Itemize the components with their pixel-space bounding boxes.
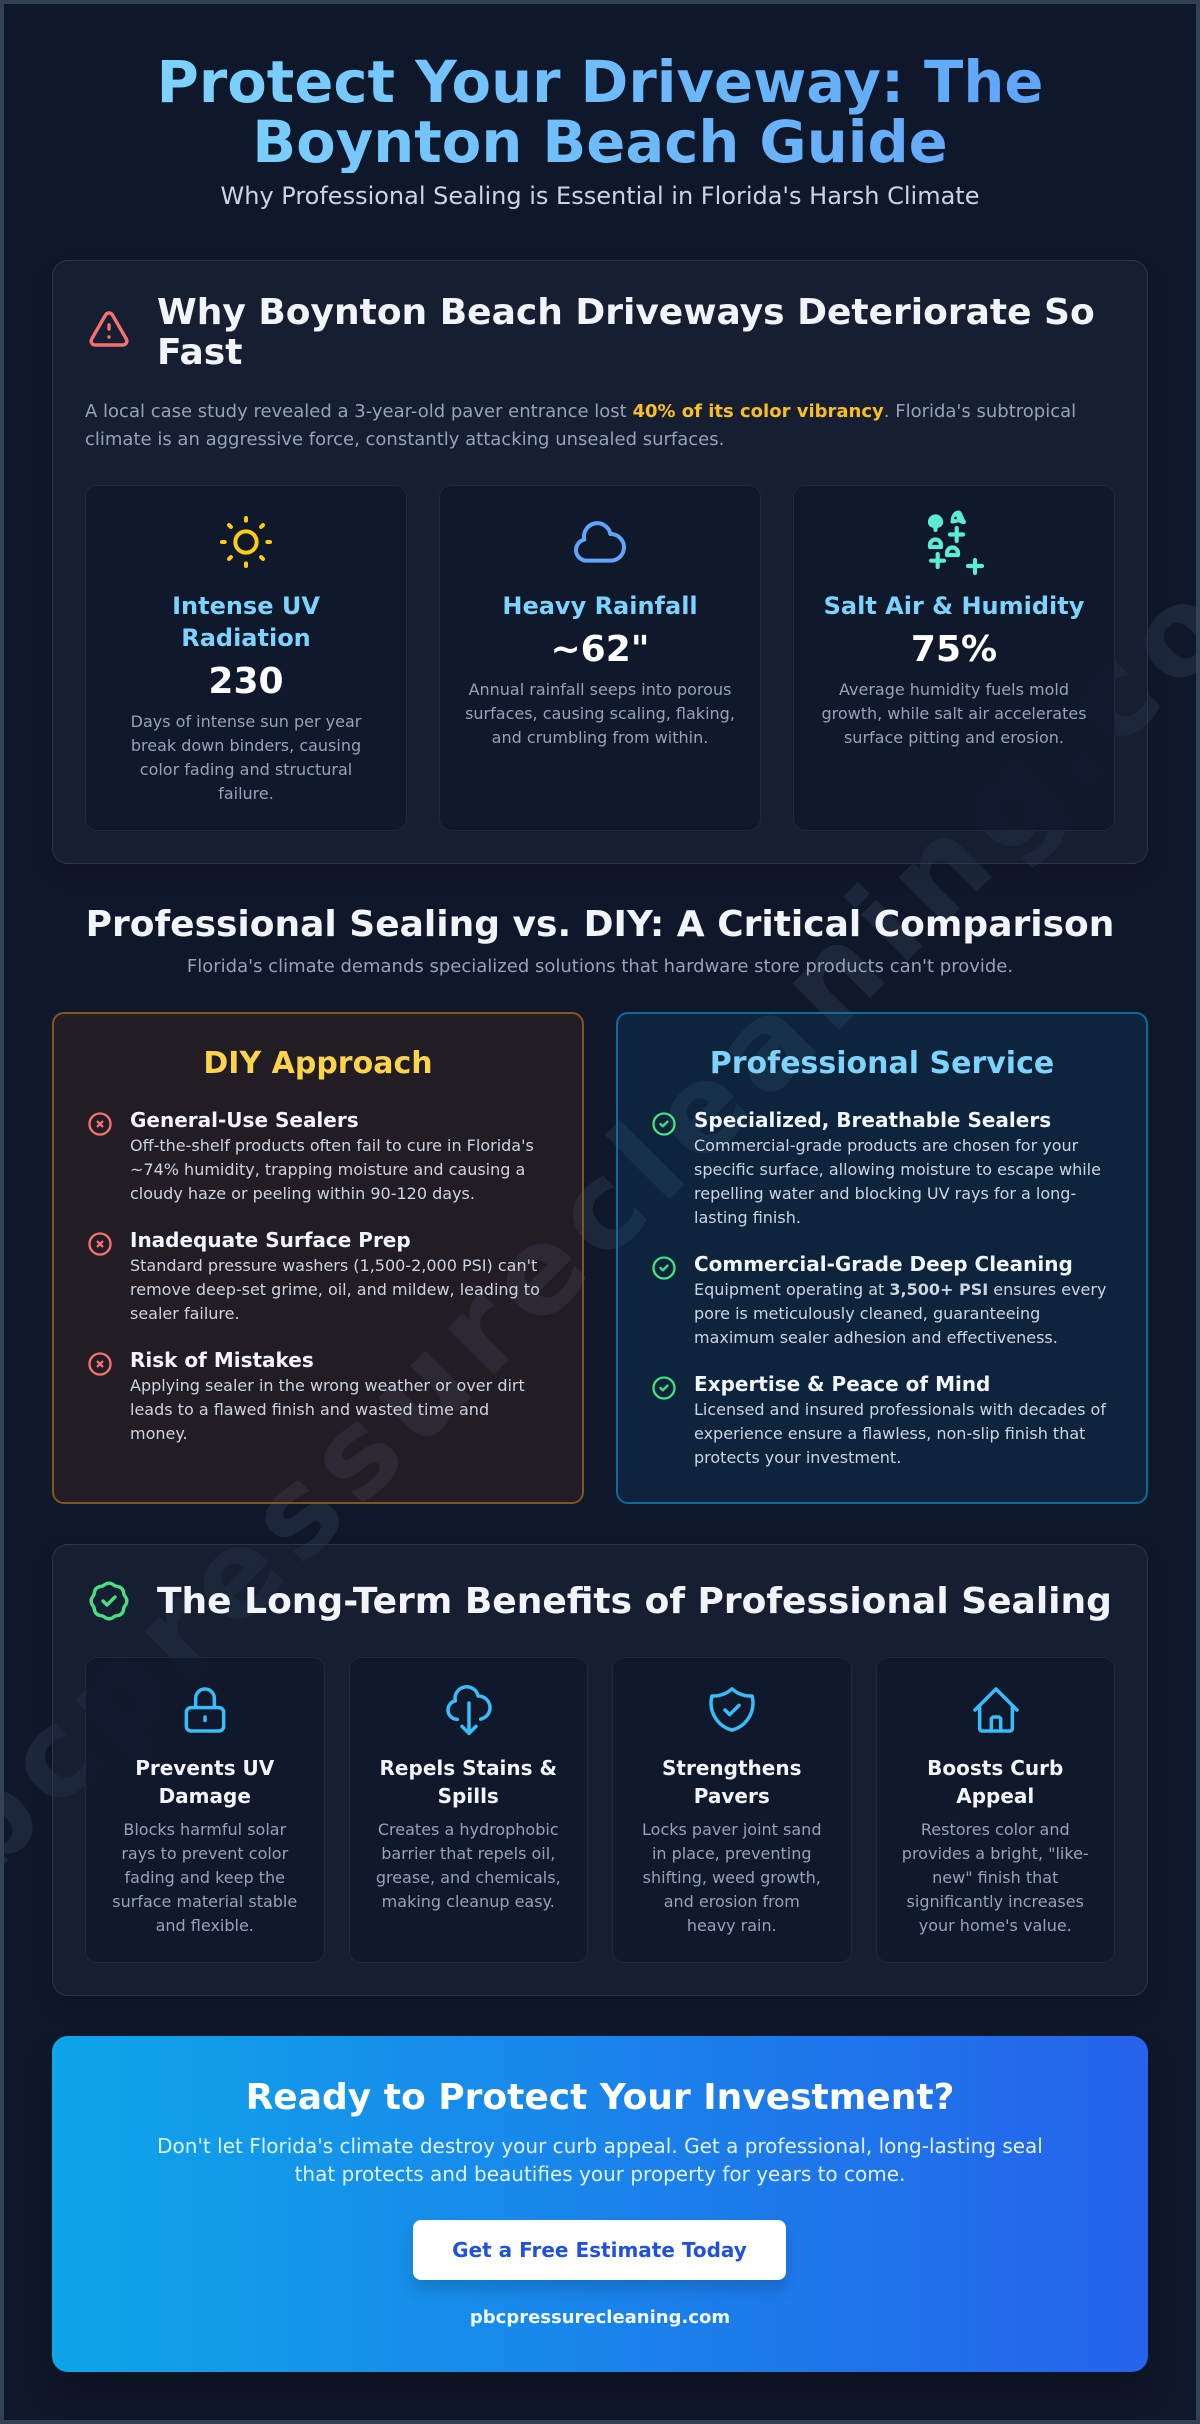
stat description: Average humidity fuels mold	[839, 680, 1069, 699]
item description: money.	[130, 1424, 188, 1443]
list item: expertise	[652, 1372, 1106, 1467]
item description: protects your investment.	[694, 1448, 901, 1467]
item description: ~74% humidity, trapping moisture and causing a	[130, 1160, 525, 1179]
icon: badge check	[89, 1582, 128, 1620]
item title: Commercial-Grade Deep Cleaning	[694, 1252, 1073, 1276]
CTA paragraph: Don't let Florida's climate destroy your curb appeal. Get a professional, long-lasting seal	[157, 2134, 1043, 2158]
icon: check circle	[652, 1256, 676, 1280]
benefit description	[876, 1818, 1114, 1938]
comparison subtitle: Florida's climate demands specialized solutions that hardware store products can't provide.	[187, 956, 1013, 977]
stat number: 75%	[911, 629, 997, 670]
benefit description: surface material stable	[112, 1892, 297, 1911]
icon: x circle	[88, 1352, 112, 1376]
benefit description	[112, 1820, 297, 1935]
DIY heading: DIY Approach	[203, 1046, 433, 1081]
stat description: color fading and structural	[140, 760, 352, 779]
item description: leads to a flawed finish and wasted time and	[130, 1400, 489, 1419]
stat description: surfaces, causing scaling, flaking,	[465, 704, 735, 723]
subtitle: Why Professional Sealing is Essential in Florida's Harsh Climate	[220, 182, 979, 210]
benefit description: in place, preventing	[652, 1844, 812, 1863]
benefit description: shifting, weed growth,	[643, 1868, 821, 1887]
stat description: and crumbling from within.	[492, 728, 708, 747]
icon: home	[973, 1687, 1019, 1733]
icon: check circle	[652, 1376, 676, 1400]
item title: General-Use Sealers	[130, 1108, 359, 1132]
icon: lock	[184, 1687, 226, 1733]
CTA paragraph	[52, 2132, 1148, 2188]
list item: general-use sealers	[88, 1108, 534, 1203]
benefit description: Blocks harmful solar	[123, 1820, 286, 1839]
item description	[130, 1136, 534, 1203]
benefit description: fading and keep the	[124, 1868, 285, 1887]
stat number: 230	[208, 661, 284, 702]
website link: pbcpressurecleaning.com	[470, 2307, 730, 2328]
item description: Standard pressure washers (1,500-2,000 PSI) can't	[130, 1256, 537, 1275]
item description	[694, 1400, 1106, 1467]
heading: comparison: Professional Sealing vs. DIY: A Critical Comparison	[86, 904, 1114, 945]
item description: remove deep-set grime, oil, and mildew, leading to	[130, 1280, 540, 1299]
stat description: failure.	[218, 784, 274, 803]
stat description: Annual rainfall seeps into porous	[469, 680, 731, 699]
benefit description: heavy rain.	[687, 1916, 777, 1935]
stat description	[465, 680, 735, 747]
icon: x circle	[88, 1112, 112, 1136]
benefit description: significantly increases	[907, 1892, 1084, 1911]
heading: why driveways deteriorate	[157, 292, 1095, 373]
stat title: Radiation	[181, 624, 311, 652]
item description	[694, 1280, 1106, 1347]
benefit description	[376, 1820, 561, 1911]
benefit card: curb appeal	[876, 1657, 1115, 1963]
item description: cloudy haze or peeling within 90-120 days.	[130, 1184, 475, 1203]
benefit title	[380, 1756, 557, 1808]
stat description: growth, while salt air accelerates	[821, 704, 1087, 723]
benefit description: provides a bright, "like-	[902, 1844, 1089, 1863]
icon: cloud	[574, 521, 626, 563]
panel: professional service	[616, 1012, 1148, 1504]
benefit description: Creates a hydrophobic	[378, 1820, 559, 1839]
icon: cloud download	[446, 1685, 492, 1736]
benefit title: Prevents UV	[135, 1756, 274, 1780]
benefit title	[135, 1756, 274, 1808]
benefit card: stains	[348, 1657, 588, 1963]
panel: why driveways deteriorate	[52, 260, 1148, 864]
list item: deep cleaning	[652, 1252, 1106, 1347]
benefit description: Restores color and	[921, 1820, 1070, 1839]
item description: repelling water and blocking UV rays for a long-	[694, 1184, 1076, 1203]
stat title: Heavy Rainfall	[502, 592, 698, 620]
CTA button	[413, 2220, 786, 2280]
icon: shield check	[709, 1687, 755, 1732]
heading: benefits: The Long-Term Benefits of Professional Sealing	[157, 1581, 1112, 1622]
professional heading: Professional Service	[710, 1046, 1054, 1081]
stat description: Days of intense sun per year	[131, 712, 361, 731]
benefit title: Pavers	[694, 1784, 770, 1808]
item description: sealer failure.	[130, 1304, 240, 1323]
benefit title	[876, 1754, 1114, 1810]
list item: surface prep	[88, 1228, 540, 1323]
item description: maximum sealer adhesion and effectiveness.	[694, 1328, 1058, 1347]
item description	[130, 1376, 525, 1443]
benefit description: Locks paver joint sand	[642, 1820, 821, 1839]
item description: Equipment operating at 3,500+ PSI ensures every	[694, 1280, 1106, 1299]
item title: Inadequate Surface Prep	[130, 1228, 411, 1252]
item description: experience ensure a flawless, non-slip finish that	[694, 1424, 1085, 1443]
CTA heading: Ready to Protect Your Investment?	[246, 2077, 954, 2118]
stat number: ~62"	[550, 629, 650, 670]
icon: sun	[220, 516, 272, 568]
item description: pore is meticulously cleaned, guaranteeing	[694, 1304, 1040, 1323]
stat title: Intense UV	[172, 592, 320, 620]
intro paragraph	[85, 401, 1076, 450]
benefit description: making cleanup easy.	[382, 1892, 555, 1911]
heading: why driveways deteriorate: Fast	[157, 332, 242, 373]
stat description: break down binders, causing	[131, 736, 361, 755]
benefit description: and erosion from	[664, 1892, 800, 1911]
title	[157, 49, 1043, 176]
benefit description	[642, 1820, 821, 1935]
title: Protect Your Driveway: The	[157, 49, 1043, 116]
intro paragraph: A local case study revealed a 3-year-old paver entrance lost 40% of its color vibrancy. Florida's subtropical	[85, 401, 1076, 422]
benefit description: barrier that repels oil,	[381, 1844, 555, 1863]
icon: salt droplets	[928, 510, 984, 576]
benefit description: your home's value.	[919, 1916, 1072, 1935]
item description: Licensed and insured professionals with decades of	[694, 1400, 1106, 1419]
item description	[130, 1256, 540, 1323]
benefit description: grease, and chemicals,	[376, 1868, 561, 1887]
panel: long-term benefits	[52, 1544, 1148, 1996]
icon: check circle	[652, 1112, 676, 1136]
item description: specific surface, allowing moisture to escape while	[694, 1160, 1101, 1179]
benefit description: and flexible.	[156, 1916, 254, 1935]
item description: Off-the-shelf products often fail to cure in Florida's	[130, 1136, 534, 1155]
stat card: UV	[85, 485, 407, 831]
intro paragraph: climate is an aggressive force, constantly attacking unsealed surfaces.	[85, 429, 724, 450]
item title: Specialized, Breathable Sealers	[694, 1108, 1051, 1132]
item description: lasting finish.	[694, 1208, 801, 1227]
stat title: Salt Air & Humidity	[824, 592, 1084, 620]
stat description	[821, 680, 1087, 747]
benefit title: Spills	[438, 1784, 499, 1808]
benefit title: Repels Stains &	[380, 1756, 557, 1780]
benefit title: Appeal	[956, 1784, 1034, 1808]
benefit title: Boosts Curb	[927, 1756, 1063, 1780]
benefit description: new" finish that	[932, 1868, 1058, 1887]
icon: warning triangle	[89, 311, 129, 347]
CTA button: Get a Free Estimate Today	[452, 2238, 747, 2262]
stat description	[131, 712, 362, 803]
title: Boynton Beach Guide	[252, 109, 948, 176]
stat card: salt and humidity	[793, 485, 1115, 831]
stat title	[172, 592, 320, 652]
icon: x circle	[88, 1232, 112, 1256]
CTA paragraph: that protects and beautifies your property for years to come.	[295, 2162, 905, 2186]
item description: Commercial-grade products are chosen for your	[694, 1136, 1078, 1155]
benefit card: UV damage	[85, 1657, 324, 1963]
item description: Applying sealer in the wrong weather or over dirt	[130, 1376, 525, 1395]
stat card: rainfall	[439, 485, 761, 831]
benefit title: Strengthens	[662, 1756, 801, 1780]
stat description: surface pitting and erosion.	[844, 728, 1064, 747]
benefit description: rays to prevent color	[121, 1844, 288, 1863]
item title: Expertise & Peace of Mind	[694, 1372, 990, 1396]
item title: Risk of Mistakes	[130, 1348, 314, 1372]
item description	[694, 1136, 1101, 1227]
benefit card: pavers	[612, 1657, 852, 1963]
benefit title	[662, 1756, 801, 1808]
list item: breathable sealers	[652, 1108, 1101, 1227]
panel: DIY approach	[52, 1012, 584, 1504]
benefit title: Damage	[159, 1784, 251, 1808]
panel: call to action	[52, 2036, 1148, 2372]
list item: risk of mistakes	[88, 1348, 525, 1443]
heading: why driveways deteriorate: Why Boynton Beach Driveways Deteriorate So	[157, 292, 1095, 333]
